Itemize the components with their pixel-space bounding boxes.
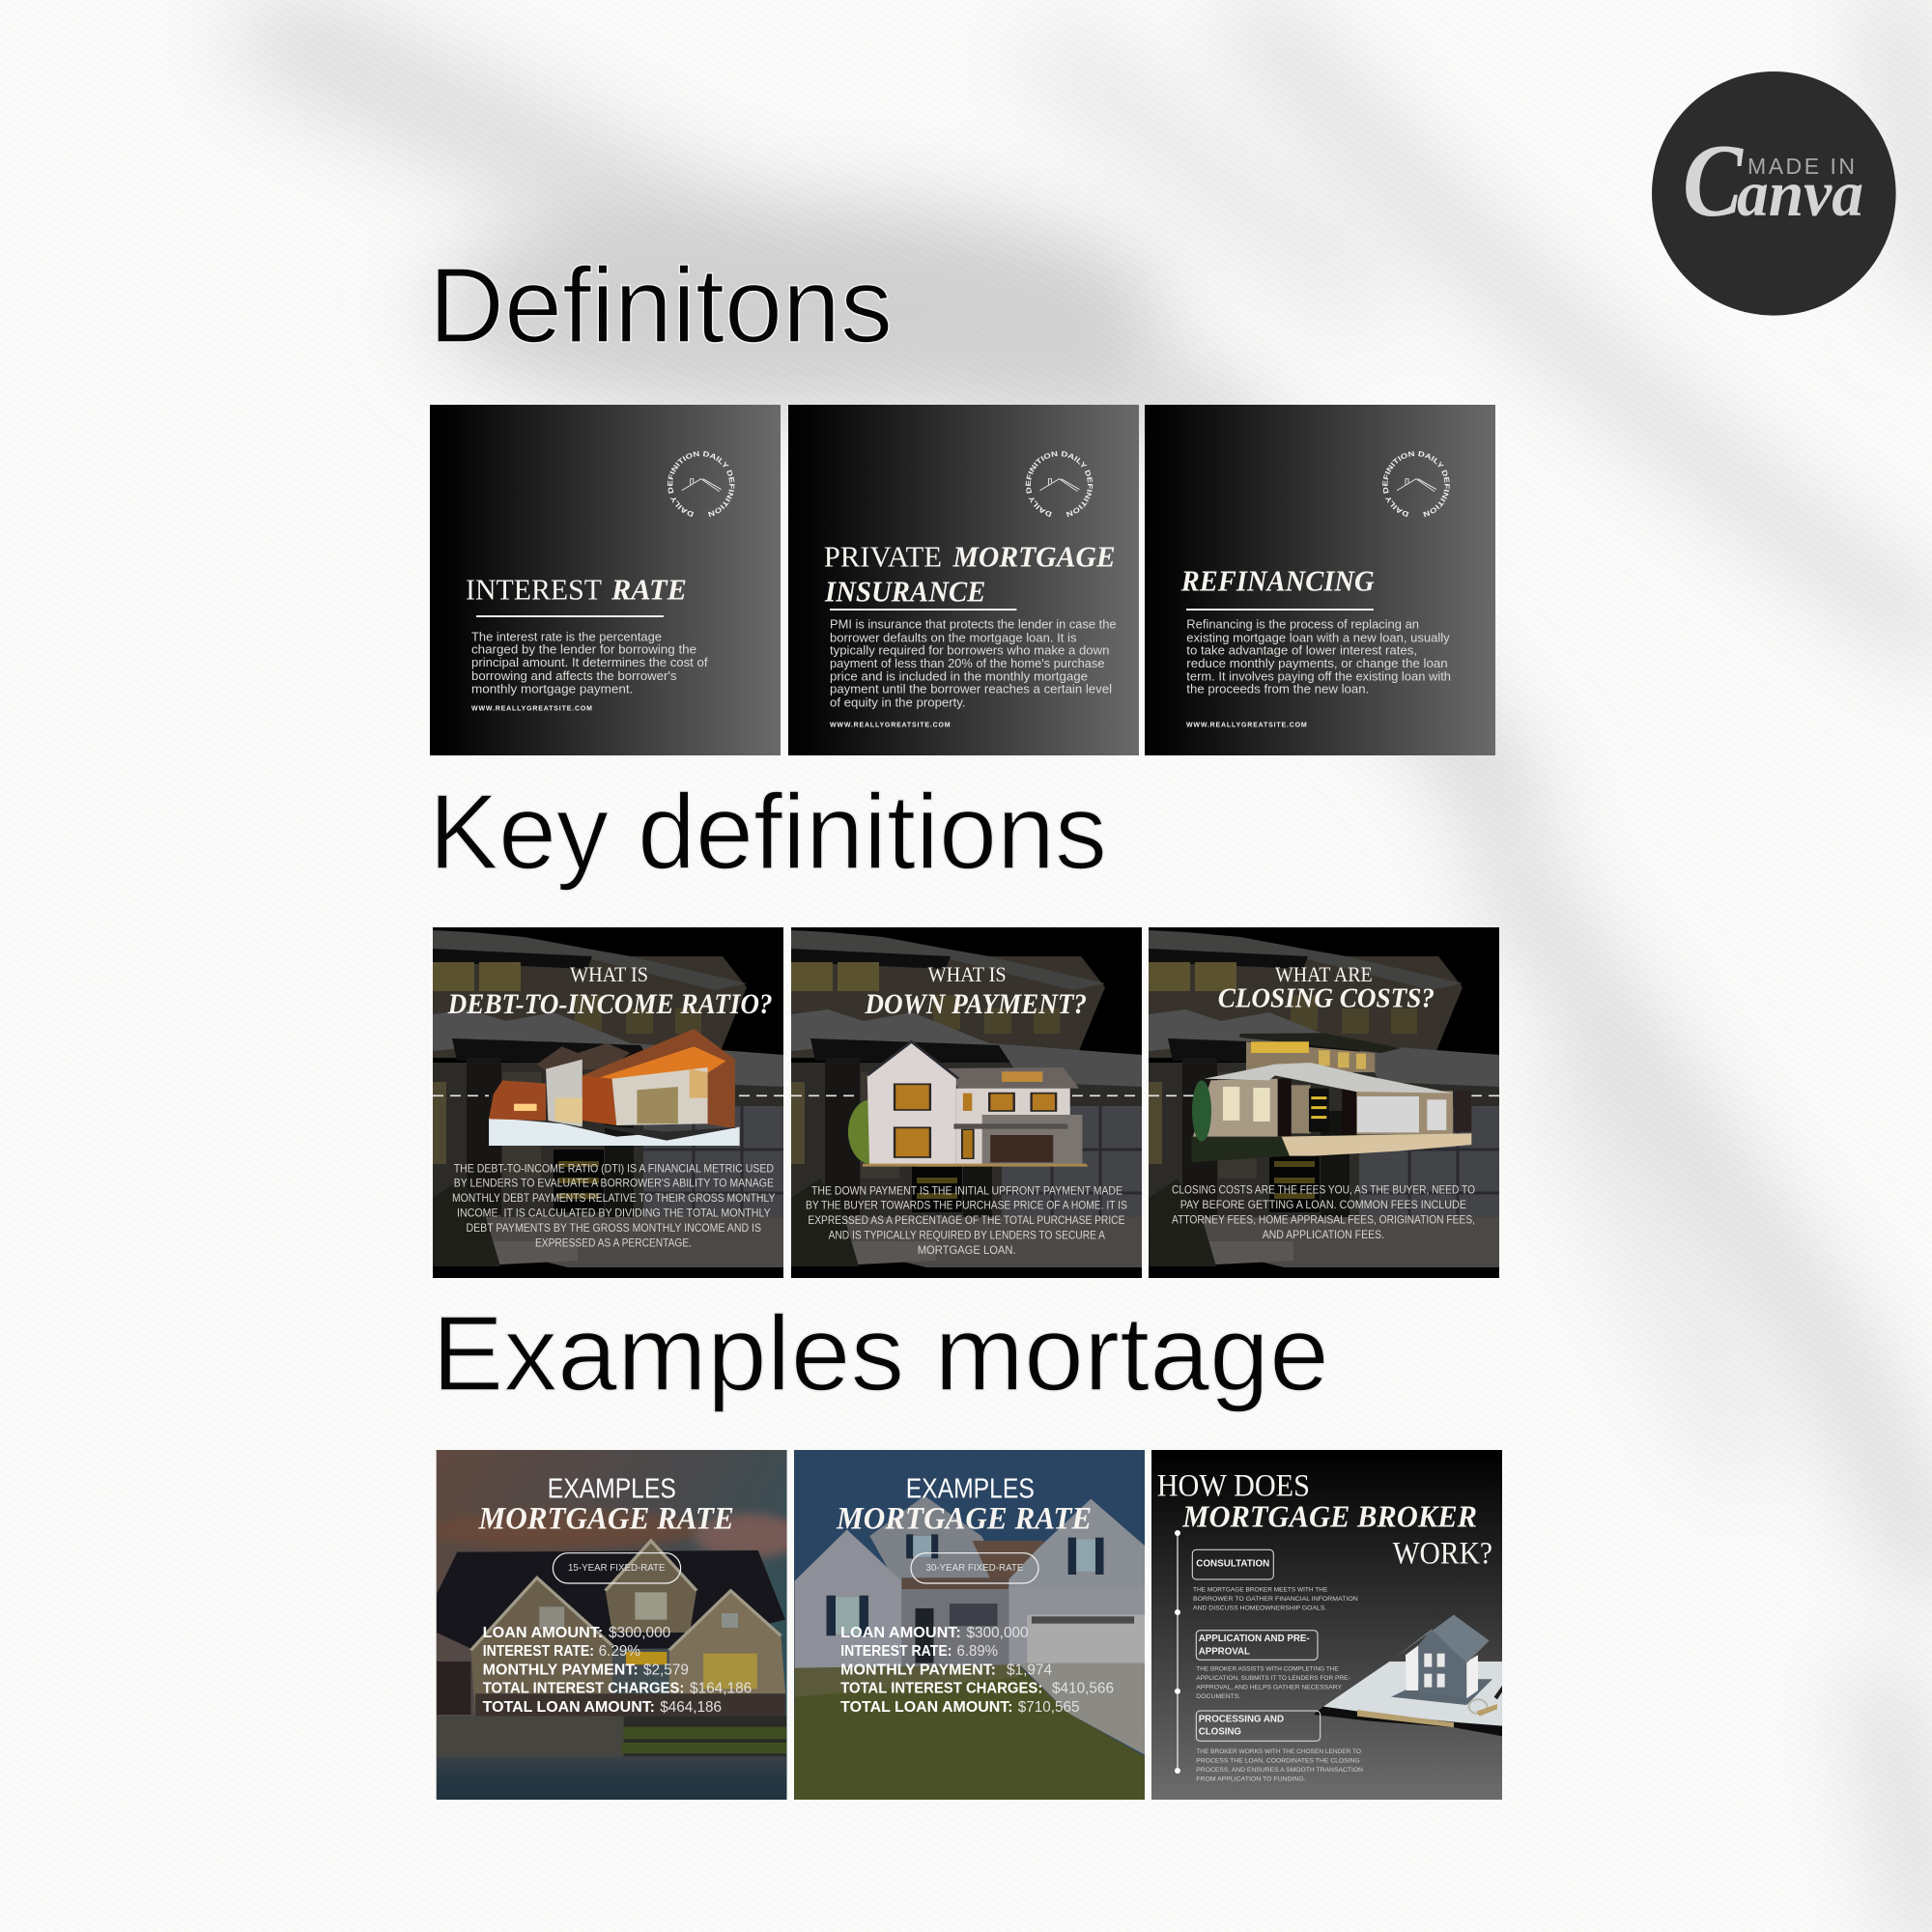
heading: Definitons: Definitons: [429, 246, 893, 365]
card title: [837, 1478, 1091, 1529]
loan figures: $2,579: [643, 1662, 689, 1678]
made in Canva badge: MADE IN: [1747, 154, 1855, 179]
definition text: borrowing and affects the borrower's: [471, 668, 677, 683]
panel: refinancing: [1145, 405, 1495, 755]
loan figures: INTEREST RATE:: [840, 1643, 952, 1660]
loan figures: 6.89%: [956, 1643, 998, 1660]
definition text: principal amount. It determines the cost of: [471, 655, 708, 669]
step 1: consultation: AND DISCUSS HOMEOWNERSHIP GOALS.: [1193, 1605, 1326, 1611]
step 2: application and pre-approval: APPLICATION, SUBMITS IT TO LENDERS FOR PRE-: [1196, 1675, 1350, 1682]
card title: [447, 962, 773, 1020]
panel: interest rate: [430, 405, 781, 755]
definition text: THE DOWN PAYMENT IS THE INITIAL UPFRONT PAYMENT MADE: [811, 1184, 1122, 1197]
definition text: AND APPLICATION FEES.: [1263, 1229, 1384, 1241]
loan figures: $710,565: [1018, 1699, 1080, 1716]
card title: MORTGAGE RATE: [836, 1501, 1092, 1536]
card title: WHAT IS: [570, 962, 648, 986]
definition text: THE DEBT-TO-INCOME RATIO (DTI) IS A FINANCIAL METRIC USED: [454, 1162, 774, 1175]
card title: MORTGAGE BROKER: [1181, 1499, 1477, 1534]
definition text: borrower defaults on the mortgage loan. It is: [830, 630, 1077, 644]
step 1: consultation: THE MORTGAGE BROKER MEETS WITH THE: [1193, 1586, 1328, 1593]
loan figures: TOTAL INTEREST CHARGES:: [840, 1681, 1042, 1697]
definition text: existing mortgage loan with a new loan, usually: [1186, 630, 1450, 644]
made in Canva badge: [1652, 71, 1896, 316]
step 2: application and pre-approval: APPROVAL: [1199, 1646, 1250, 1657]
definition text: PMI is insurance that protects the lender in case the: [830, 617, 1117, 632]
loan figures: $300,000: [966, 1625, 1029, 1641]
card title: WHAT ARE: [1275, 962, 1373, 986]
step 3: processing and closing: FROM APPLICATION TO FUNDING.: [1196, 1776, 1306, 1782]
definition text: the proceeds from the new loan.: [1186, 682, 1369, 696]
step 2: application and pre-approval: THE BROKER ASSISTS WITH COMPLETING THE: [1196, 1666, 1339, 1673]
house photo: suburban house at dusk: [1191, 1033, 1471, 1162]
card title: [864, 962, 1087, 1020]
panel: debt-to-income ratio: [433, 927, 783, 1278]
definition text: PAY BEFORE GETTING A LOAN. COMMON FEES INCLUDE: [1180, 1199, 1466, 1211]
card title: WORK?: [1393, 1536, 1492, 1571]
panel: closing costs: [1149, 927, 1499, 1278]
panel: private mortgage insurance: [788, 405, 1139, 755]
step 3: processing and closing: PROCESS THE LOAN, COORDINATES THE CLOSING: [1196, 1757, 1360, 1764]
card title: [466, 573, 687, 607]
definition text: CLOSING COSTS ARE THE FEES YOU, AS THE BUYER, NEED TO: [1172, 1184, 1475, 1197]
made in Canva badge: anva: [1737, 156, 1863, 230]
definition text: MORTGAGE LOAN.: [918, 1244, 1016, 1257]
definition text: [806, 1184, 1127, 1257]
pill label: [553, 1553, 681, 1583]
logo badge: DAILY DEFINITION DAILY DEFINITION: [1026, 451, 1094, 518]
panel: private mortgage insurance: WWW.REALLYGREATSITE.COM: [830, 722, 951, 728]
step 3: processing and closing: CLOSING: [1199, 1727, 1241, 1738]
card title: PRIVATE: [824, 540, 942, 574]
definition text: EXPRESSED AS A PERCENTAGE.: [535, 1236, 692, 1249]
definition text: [830, 617, 1117, 710]
card title: REFINANCING: [1180, 563, 1375, 597]
definition text: Refinancing is the process of replacing an: [1186, 617, 1419, 632]
definition text: to take advantage of lower interest rates,: [1186, 643, 1417, 658]
definition text: [1186, 617, 1451, 696]
definition text: INCOME. IT IS CALCULATED BY DIVIDING THE TOTAL MONTHLY: [457, 1207, 771, 1219]
card title: CLOSING COSTS?: [1218, 983, 1435, 1013]
card title: INTEREST: [466, 573, 602, 607]
pill label: 30-YEAR FIXED-RATE: [925, 1562, 1023, 1574]
loan figures: MONTHLY PAYMENT:: [483, 1662, 639, 1678]
made in Canva badge: C: [1683, 124, 1745, 239]
definition text: MONTHLY DEBT PAYMENTS RELATIVE TO THEIR GROSS MONTHLY: [452, 1192, 776, 1205]
step 1: consultation: [1192, 1549, 1358, 1611]
definition text: ATTORNEY FEES, HOME APPRAISAL FEES, ORIGINATION FEES,: [1172, 1213, 1475, 1226]
panel: interest rate: WWW.REALLYGREATSITE.COM: [471, 706, 592, 713]
step 1: consultation: BORROWER TO GATHER FINANCIAL INFORMATION: [1193, 1596, 1358, 1603]
card title: DEBT-TO-INCOME RATIO?: [447, 988, 773, 1020]
definition text: BY THE BUYER TOWARDS THE PURCHASE PRICE OF A HOME. IT IS: [806, 1200, 1127, 1212]
pill label: 15-YEAR FIXED-RATE: [568, 1562, 665, 1574]
card title: INSURANCE: [824, 574, 985, 608]
card title: [1157, 1475, 1492, 1564]
step 1: consultation: CONSULTATION: [1196, 1559, 1269, 1570]
definition text: typically required for borrowers who make a down: [830, 643, 1109, 658]
loan figures: [840, 1625, 1114, 1716]
step 3: processing and closing: THE BROKER WORKS WITH THE CHOSEN LENDER TO: [1196, 1748, 1361, 1755]
card title: [1218, 962, 1435, 1013]
panel: 15-year fixed-rate example: [430, 1449, 804, 1802]
step 2: application and pre-approval: APPROVAL, AND HELPS GATHER NECESSARY: [1196, 1684, 1342, 1690]
loan figures: 6.29%: [599, 1643, 640, 1660]
definition text: monthly mortgage payment.: [471, 681, 633, 696]
step 2: application and pre-approval: APPLICATION AND PRE-: [1199, 1634, 1310, 1644]
definition text: The interest rate is the percentage: [471, 629, 662, 643]
card title: [824, 540, 1116, 608]
definition text: reduce monthly payments, or change the loan: [1186, 656, 1448, 670]
heading: Examples mortage: Examples mortage: [432, 1294, 1329, 1413]
definition text: payment until the borrower reaches a certain level: [830, 682, 1112, 696]
definition text: BY LENDERS TO EVALUATE A BORROWER'S ABILITY TO MANAGE: [454, 1178, 774, 1190]
loan figures: LOAN AMOUNT:: [840, 1625, 961, 1641]
step 3: processing and closing: [1196, 1711, 1363, 1782]
loan figures: $464,186: [660, 1699, 722, 1716]
loan figures: TOTAL LOAN AMOUNT:: [840, 1699, 1013, 1716]
card title: HOW DOES: [1157, 1468, 1310, 1503]
photo: house at sunset: [430, 1449, 804, 1802]
photo: white suburban house: [792, 1449, 1148, 1802]
card title: EXAMPLES: [548, 1474, 676, 1505]
definition text: [452, 1162, 776, 1249]
panel: 30-year fixed-rate example: [792, 1449, 1148, 1802]
definition text: [1172, 1184, 1475, 1241]
card title: RATE: [611, 573, 687, 607]
step 3: processing and closing: PROCESS, AND ENSURES A SMOOTH TRANSACTION: [1196, 1767, 1363, 1774]
loan figures: $1,974: [1007, 1662, 1052, 1678]
definition text: charged by the lender for borrowing the: [471, 642, 696, 657]
loan figures: TOTAL INTEREST CHARGES:: [483, 1681, 684, 1697]
loan figures: LOAN AMOUNT:: [483, 1625, 603, 1641]
definition text: AND IS TYPICALLY REQUIRED BY LENDERS TO SECURE A: [829, 1230, 1105, 1242]
card title: MORTGAGE RATE: [478, 1501, 734, 1536]
panel: how does a mortgage broker work: [1151, 1450, 1502, 1800]
step 2: application and pre-approval: DOCUMENTS.: [1196, 1693, 1240, 1700]
definition text: payment of less than 20% of the home's purchase: [830, 656, 1105, 670]
loan figures: $164,186: [690, 1681, 752, 1697]
definition text: EXPRESSED AS A PERCENTAGE OF THE TOTAL PURCHASE PRICE: [808, 1214, 1125, 1227]
house photo: modern orange house in snow: [489, 1029, 740, 1146]
step 2: application and pre-approval: [1196, 1631, 1350, 1700]
definition text: price and is included in the monthly mortgage: [830, 668, 1088, 683]
logo badge: DAILY DEFINITION DAILY DEFINITION: [668, 451, 734, 518]
pill label: [911, 1553, 1038, 1583]
loan figures: TOTAL LOAN AMOUNT:: [483, 1699, 655, 1716]
card title: [478, 1478, 732, 1529]
card title: WHAT IS: [927, 962, 1007, 986]
definition text: [471, 629, 708, 696]
panel: down payment: [791, 927, 1142, 1278]
heading: Key definitions: Key definitions: [429, 773, 1107, 892]
definition text: term. It involves paying off the existing loan with: [1186, 668, 1451, 683]
panel: refinancing: WWW.REALLYGREATSITE.COM: [1186, 722, 1307, 728]
loan figures: MONTHLY PAYMENT:: [840, 1662, 996, 1678]
card title: DOWN PAYMENT?: [864, 988, 1087, 1020]
definition text: of equity in the property.: [830, 696, 966, 710]
loan figures: $410,566: [1052, 1681, 1114, 1697]
loan figures: [483, 1625, 752, 1716]
card title: EXAMPLES: [906, 1474, 1035, 1505]
card title: MORTGAGE: [952, 540, 1116, 574]
logo badge: DAILY DEFINITION DAILY DEFINITION: [1382, 451, 1450, 518]
photo: model house on contract clipboard: [1314, 1615, 1502, 1736]
loan figures: $300,000: [609, 1625, 671, 1641]
loan figures: INTEREST RATE:: [483, 1643, 594, 1660]
timeline: [1175, 1530, 1180, 1774]
step 3: processing and closing: PROCESSING AND: [1199, 1714, 1284, 1724]
house photo: white farmhouse: [848, 1041, 1089, 1167]
definition text: DEBT PAYMENTS BY THE GROSS MONTHLY INCOME AND IS: [466, 1222, 761, 1235]
